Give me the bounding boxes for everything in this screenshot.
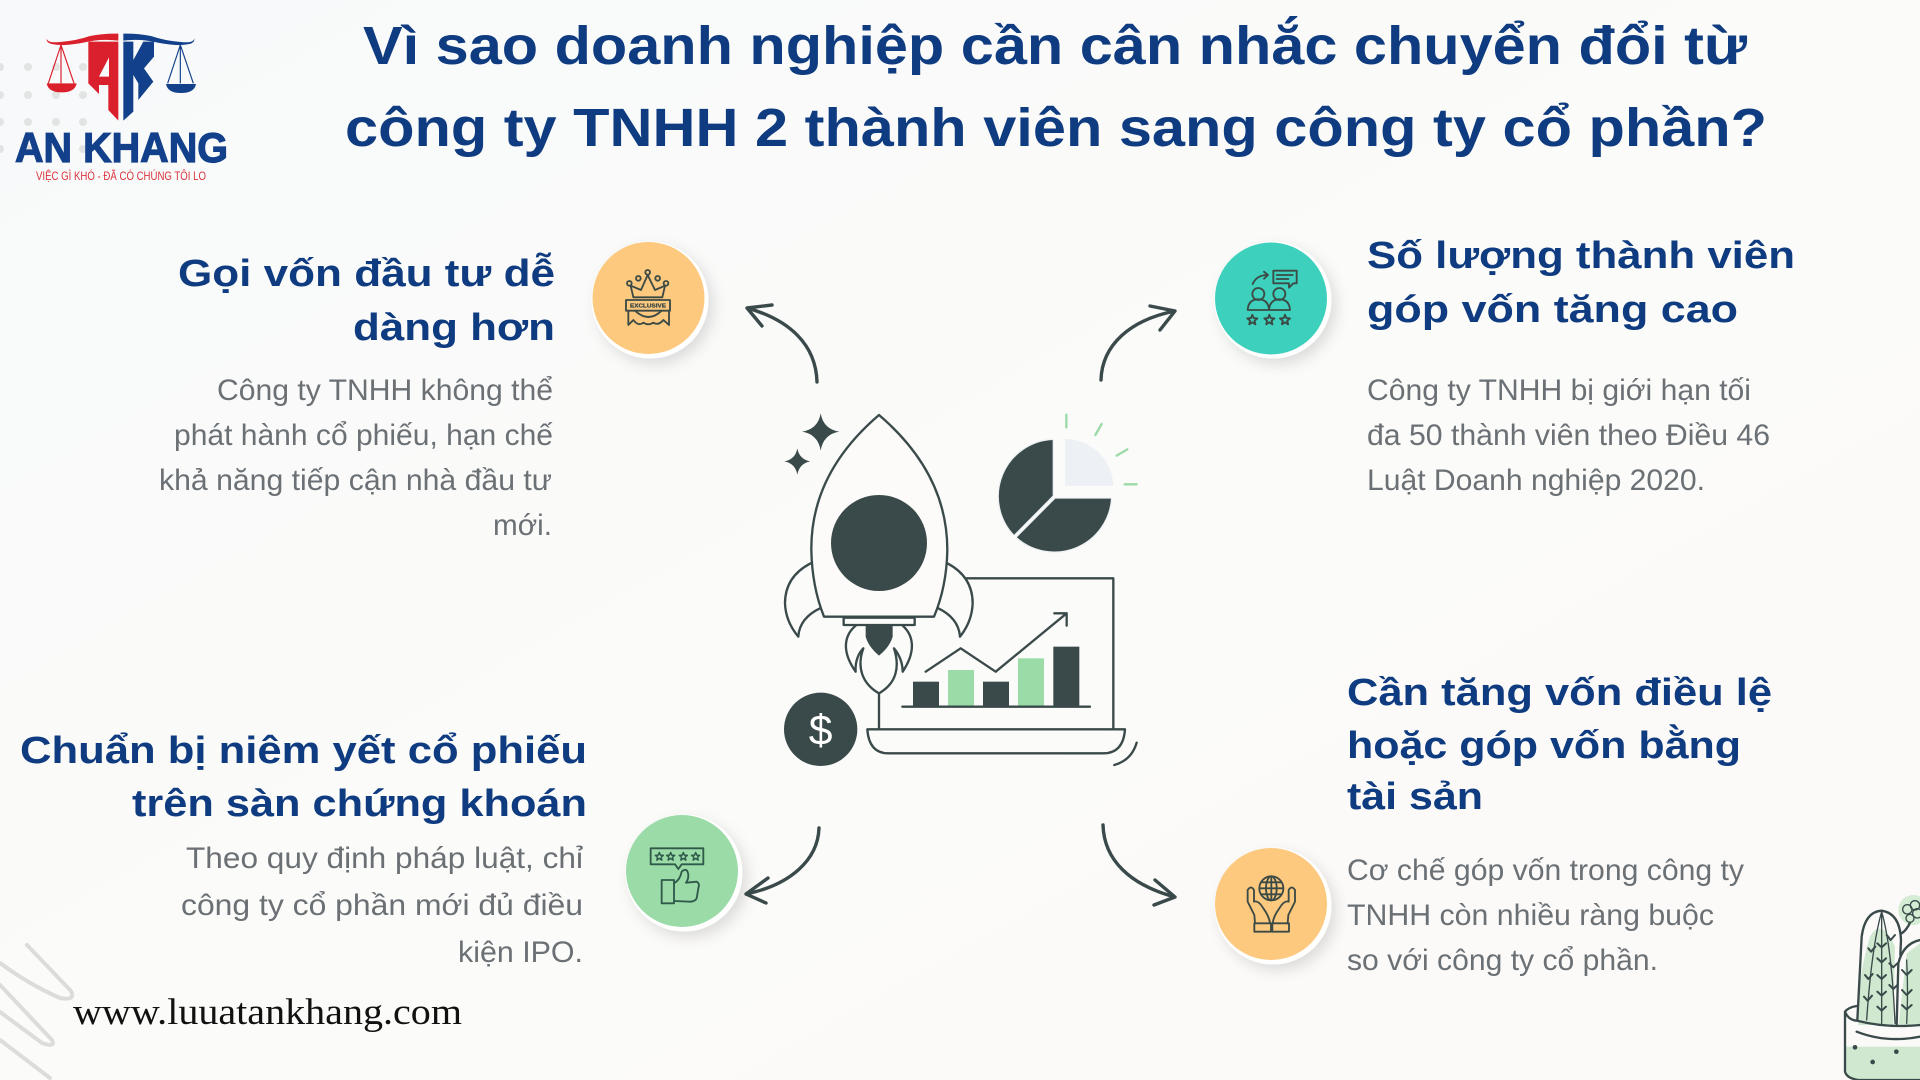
body text: công ty cổ phần mới đủ điều [181, 889, 583, 922]
arrow: to bottom right [1103, 825, 1175, 905]
icon: dollar coin: $ [809, 707, 833, 755]
icon: thumbs up rating [626, 814, 742, 932]
pie chart [998, 415, 1137, 552]
logo: An Khang [15, 34, 228, 183]
heading: Cần tăng vốn điều lệ [1347, 672, 1772, 714]
body text: so với công ty cổ phần. [1347, 944, 1658, 977]
body text: Luật Doanh nghiệp 2020. [1367, 464, 1705, 497]
heading [1367, 235, 1795, 331]
arrow: to top left [747, 305, 817, 382]
body text: khả năng tiếp cận nhà đầu tư [159, 464, 552, 497]
panel: top right, number of members [1214, 235, 1795, 497]
body text: Công ty TNHH không thể [217, 374, 553, 407]
icon: rocket [785, 415, 973, 693]
title [345, 16, 1767, 158]
body text [1367, 374, 1770, 497]
body text: Theo quy định pháp luật, chỉ [186, 842, 583, 875]
central illustration: rocket, pie chart and laptop [784, 413, 1137, 766]
heading: Chuẩn bị niêm yết cổ phiếu [20, 730, 587, 772]
title: Vì sao doanh nghiệp cần cân nhắc chuyển đổi từ [363, 16, 1748, 76]
panel: top left, raising capital [159, 242, 708, 542]
body text: phát hành cổ phiếu, hạn chế [174, 419, 553, 452]
heading: Gọi vốn đầu tư dễ [178, 251, 555, 295]
logo: An Khang: VIỆC GÌ KHÓ - ĐÃ CÓ CHÚNG TÔI LO [36, 168, 206, 183]
logo: An Khang: AN KHANG [15, 124, 228, 171]
heading [1347, 672, 1772, 818]
body text [181, 842, 583, 969]
heading: tài sản [1347, 776, 1483, 818]
icon: people and stars [1214, 242, 1332, 358]
body text [159, 374, 553, 542]
body text [1347, 854, 1744, 977]
website url: www.luuatankhang.com [73, 992, 462, 1033]
icon: crown exclusive [592, 242, 708, 358]
icon: sparkles [784, 413, 839, 475]
heading: Số lượng thành viên [1367, 235, 1795, 277]
body text: TNHH còn nhiều ràng buộc [1347, 899, 1714, 932]
arrow: to bottom left [746, 828, 819, 903]
icon: crown exclusive: EXCLUSIVE [630, 304, 666, 310]
panel: bottom right, charter capital [1214, 672, 1772, 977]
title: công ty TNHH 2 thành viên sang công ty cổ phần? [345, 98, 1767, 158]
heading [178, 251, 555, 349]
laptop with bar chart [867, 578, 1137, 765]
decorative scribble [0, 945, 72, 1078]
body text: kiện IPO. [458, 936, 583, 969]
body text: mới. [493, 509, 552, 542]
body text: Công ty TNHH bị giới hạn tối [1367, 374, 1751, 407]
body text: đa 50 thành viên theo Điều 46 [1367, 419, 1770, 452]
heading: hoặc góp vốn bằng [1347, 723, 1741, 767]
heading [20, 730, 587, 825]
icon: dollar coin [784, 693, 857, 766]
cactus plant decoration [1845, 895, 1920, 1080]
body text: Cơ chế góp vốn trong công ty [1347, 854, 1744, 887]
decorative dot grid [0, 63, 87, 153]
arrow: to top right [1101, 306, 1175, 380]
heading: dàng hơn [353, 307, 555, 349]
icon: hands holding globe [1214, 848, 1332, 964]
heading: trên sàn chứng khoán [132, 783, 587, 825]
panel: bottom left, IPO preparation [20, 730, 742, 969]
heading: góp vốn tăng cao [1367, 289, 1738, 331]
